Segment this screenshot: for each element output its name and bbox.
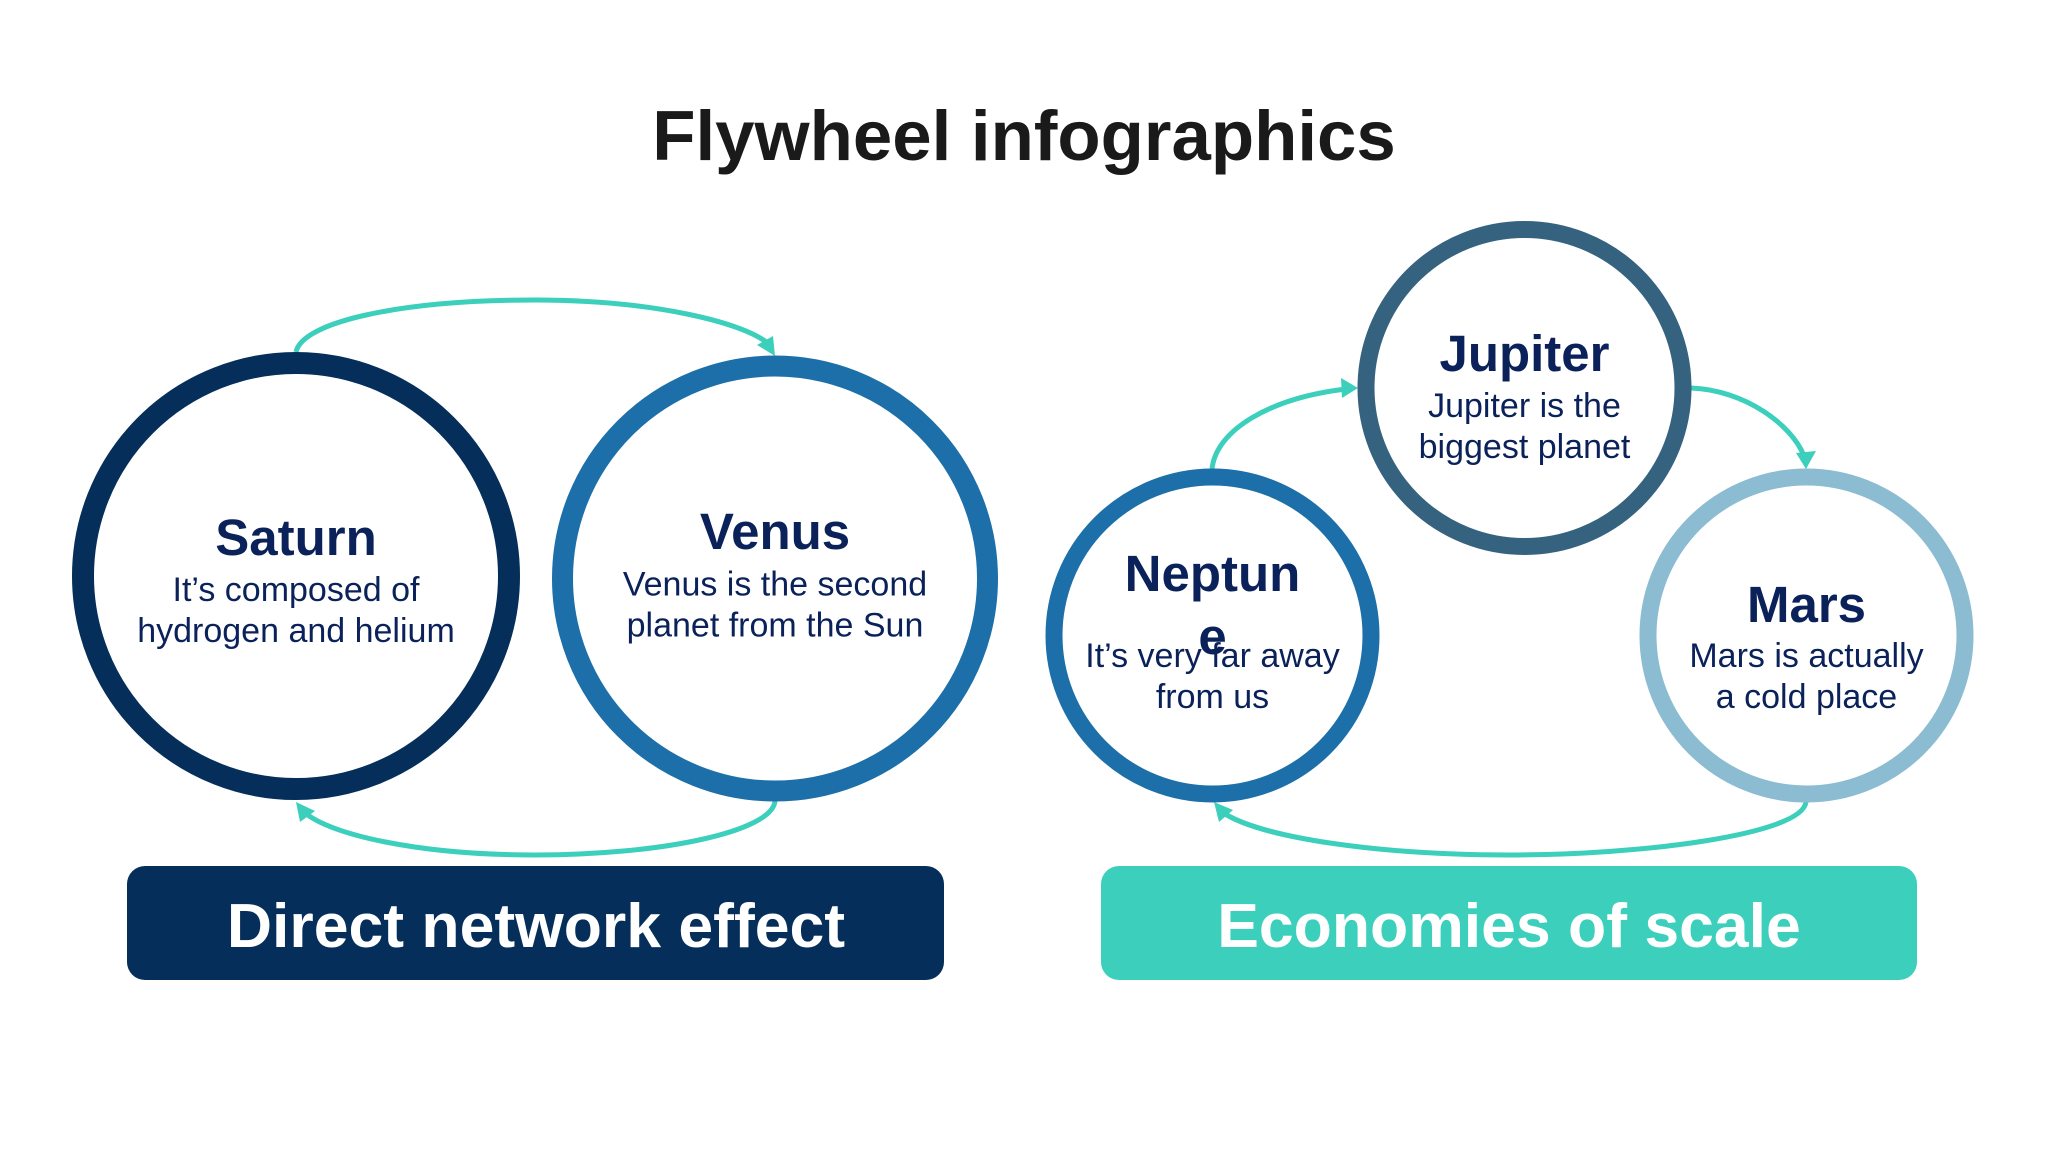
circle: Mars: Mars [1747,576,1866,633]
title: Flywheel infographics [652,97,1396,176]
label bar: Economies of scale: Economies of scale [1217,891,1801,961]
circle: Saturn: Saturn [215,509,377,566]
circle: Mars [1648,477,1965,794]
circle: Jupiter: Jupiter [1439,325,1610,382]
panel: economies of scale flywheel [1054,230,1965,980]
circle: Jupiter: biggest planet [1419,428,1631,466]
circle: Saturn: hydrogen and helium [137,612,455,650]
circle: Saturn: It’s composed of [173,571,420,609]
arrow: Mars to Neptune [1214,802,1806,855]
arrow: Jupiter to Mars [1691,388,1816,469]
circle: Neptune: from us [1156,678,1269,716]
circle: Neptune: It’s very far away [1085,637,1340,675]
label bar: Direct network effect [127,866,944,980]
circle: Saturn [83,363,509,789]
circle: Neptune: Neptun [1125,545,1300,602]
circle: Venus: Venus [700,503,850,560]
circle: Venus [562,366,988,791]
circle: Mars: a cold place [1716,678,1897,716]
circle: Mars: Mars is actually [1689,637,1924,675]
arrow: Neptune to Jupiter [1212,378,1358,469]
arrow: Saturn to Venus [296,300,775,356]
circle: Venus: planet from the Sun [627,606,923,644]
circle: Jupiter [1366,230,1683,546]
circle: Neptune [1054,477,1371,794]
panel: direct network effect flywheel [83,300,988,980]
label bar: Economies of scale [1101,866,1917,980]
label bar: Direct network effect: Direct network effect [227,891,845,961]
circle: Jupiter: Jupiter is the [1428,387,1621,425]
circle: Neptune: e [1198,608,1227,665]
circle: Venus: Venus is the second [623,566,927,604]
arrow: Venus to Saturn [296,801,775,855]
